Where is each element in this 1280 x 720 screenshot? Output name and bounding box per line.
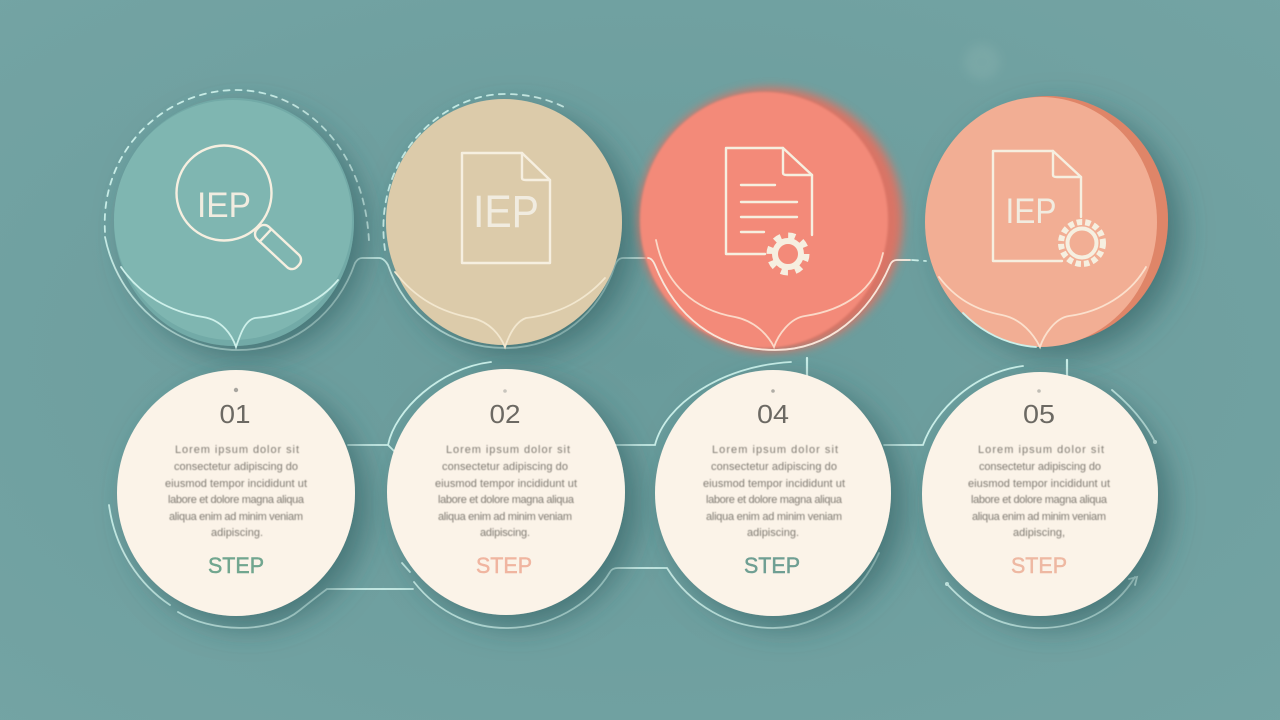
step label: STEP bbox=[208, 553, 264, 578]
body text: adipiscing, bbox=[1013, 527, 1065, 539]
body text: aliqua enim ad minim veniam bbox=[438, 511, 572, 523]
step label: STEP bbox=[744, 553, 800, 578]
panel: step 2 icon circle bbox=[383, 94, 622, 347]
disc face bbox=[114, 100, 352, 340]
icon: document with IEP and gear: IEP bbox=[1006, 192, 1056, 231]
body text bbox=[968, 444, 1110, 539]
connector line over disc bbox=[648, 258, 910, 350]
step label: STEP bbox=[1011, 553, 1067, 578]
body text: labore et dolore magna aliqua bbox=[706, 494, 843, 506]
body text: Lorem ipsum dolor sit bbox=[712, 444, 838, 456]
body text: consectetur adipiscing do bbox=[711, 461, 837, 473]
icon: document with IEP bbox=[462, 153, 550, 263]
glow bbox=[639, 88, 903, 352]
disc face bbox=[640, 92, 888, 348]
panel: step 3 icon circle bbox=[639, 88, 910, 352]
body text: aliqua enim ad minim veniam bbox=[972, 511, 1106, 523]
disc face bbox=[925, 97, 1157, 347]
card disc bbox=[387, 369, 625, 615]
icon: magnifier bbox=[176, 146, 304, 272]
body text: Lorem ipsum dolor sit bbox=[175, 444, 299, 456]
dashed ring bbox=[383, 94, 566, 250]
body text: labore et dolore magna aliqua bbox=[438, 494, 575, 506]
body text: eiusmod tempor incididunt ut bbox=[703, 478, 845, 490]
card disc bbox=[655, 370, 891, 616]
bottom connector lines bbox=[109, 358, 1157, 628]
number: 01 bbox=[220, 399, 250, 429]
body text: aliqua enim ad minim veniam bbox=[706, 511, 842, 523]
disc back bbox=[928, 96, 1168, 344]
card disc bbox=[922, 372, 1158, 616]
body text: consectetur adipiscing do bbox=[174, 461, 298, 473]
body text bbox=[703, 444, 845, 539]
icon: magnifier: IEP bbox=[197, 186, 251, 225]
panel: step 02 card bbox=[387, 369, 625, 615]
body text: eiusmod tempor incididunt ut bbox=[435, 478, 577, 490]
panel: step 4 icon circle bbox=[925, 96, 1168, 347]
panel: step 04 card bbox=[655, 370, 891, 616]
body text: consectetur adipiscing do bbox=[979, 461, 1101, 473]
panel: step 1 icon circle bbox=[105, 90, 369, 347]
disc face bbox=[386, 99, 622, 345]
outer line bbox=[963, 313, 1036, 347]
dashed ring bbox=[105, 90, 369, 242]
dot bbox=[503, 389, 507, 393]
inner line bbox=[656, 240, 883, 347]
body text: labore et dolore magna aliqua bbox=[971, 494, 1108, 506]
body text: Lorem ipsum dolor sit bbox=[978, 444, 1104, 456]
body text: aliqua enim ad minim veniam bbox=[169, 511, 303, 523]
number: 02 bbox=[490, 399, 520, 429]
body text: Lorem ipsum dolor sit bbox=[446, 444, 570, 456]
body text: eiusmod tempor incididunt ut bbox=[968, 478, 1110, 490]
icon: document with gear bbox=[726, 148, 812, 272]
inner line bbox=[121, 267, 338, 347]
body text: adipiscing. bbox=[480, 527, 530, 539]
body text bbox=[435, 444, 577, 539]
panel: step 01 card bbox=[117, 370, 355, 616]
number: 05 bbox=[1023, 399, 1055, 429]
icon: document with IEP: IEP bbox=[473, 186, 539, 237]
inner line bbox=[395, 272, 605, 347]
step label: STEP bbox=[476, 553, 532, 578]
dot bbox=[1037, 389, 1041, 393]
body text: adipiscing. bbox=[747, 527, 799, 539]
number: 04 bbox=[757, 399, 789, 429]
icon: document with IEP and gear bbox=[993, 151, 1103, 264]
body text: labore et dolore magna aliqua bbox=[168, 494, 305, 506]
body text: consectetur adipiscing do bbox=[442, 461, 568, 473]
body text: adipiscing. bbox=[211, 527, 263, 539]
dot bbox=[234, 388, 238, 392]
body text: eiusmod tempor incididunt ut bbox=[165, 478, 307, 490]
disc base bbox=[114, 98, 354, 346]
body text bbox=[165, 444, 307, 539]
top connector line bbox=[105, 237, 926, 350]
faint decorative circle bbox=[964, 44, 1000, 80]
dot bbox=[771, 389, 775, 393]
inner line bbox=[939, 267, 1146, 347]
panel: step 05 card bbox=[922, 372, 1158, 616]
card disc bbox=[117, 370, 355, 616]
